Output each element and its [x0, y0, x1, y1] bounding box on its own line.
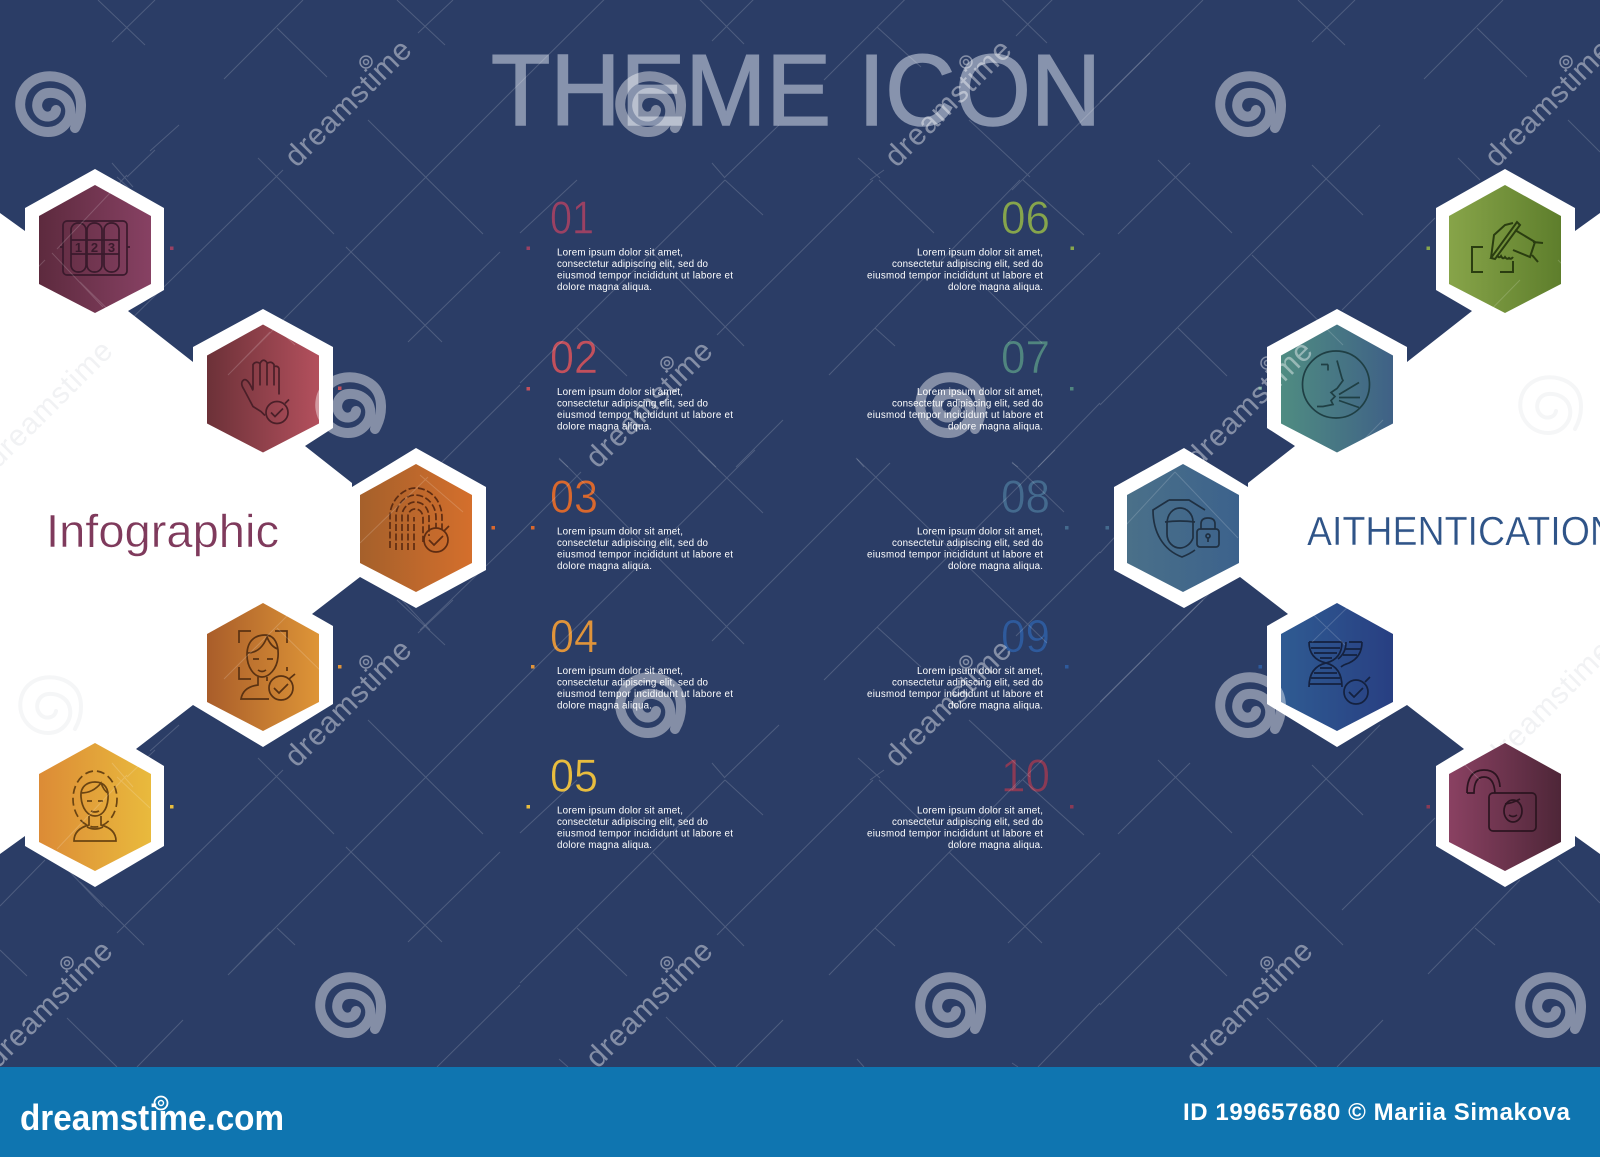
item 07: 07: [1001, 331, 1050, 383]
watermark small logos: [61, 56, 1572, 969]
item 06: 06: [1001, 192, 1050, 244]
watermark text: dreamstime: [278, 33, 418, 173]
item 09: 09: [1001, 610, 1050, 662]
item 08: 08: [1001, 470, 1050, 522]
text block 05: consectetur adipiscing elit, sed do: [557, 817, 709, 828]
text block 10: eiusmod tempor incididunt ut labore et: [867, 828, 1043, 840]
text block 08: Lorem ipsum dolor sit amet,: [917, 526, 1043, 538]
text block 10: dolore magna aliqua.: [948, 840, 1043, 851]
text block 10: [867, 806, 1044, 851]
hexagon 03 with fingerprint icon: [360, 464, 472, 592]
icon: DNA check: [1309, 642, 1370, 704]
item 10: [867, 750, 1050, 851]
icon: shield with lock: [1153, 500, 1219, 557]
item 05: [550, 750, 733, 851]
text block 08: eiusmod tempor incididunt ut labore et: [867, 550, 1043, 560]
text block 03: dolore magna aliqua.: [557, 561, 652, 572]
text block 05: [557, 806, 733, 851]
icon: keypad: 1: [75, 240, 82, 255]
icon: hand scan: [242, 360, 289, 424]
text block 04: dolore magna aliqua.: [557, 700, 652, 712]
item 03: [550, 470, 733, 572]
text block 09: consectetur adipiscing elit, sed do: [892, 678, 1044, 688]
watermark text: dreamstime: [579, 934, 719, 1074]
text block 02: eiusmod tempor incididunt ut labore et: [557, 410, 733, 421]
panel: right white band: [1114, 169, 1600, 887]
icon: voice recognition: [1302, 351, 1370, 418]
text block 04: Lorem ipsum dolor sit amet,: [557, 666, 683, 677]
text block 08: [867, 526, 1044, 572]
text block 07: [867, 387, 1044, 432]
icon: face id: [239, 631, 295, 700]
item 02: 02: [550, 331, 598, 383]
text block 10: consectetur adipiscing elit, sed do: [892, 817, 1044, 828]
item 10: 10: [1001, 750, 1050, 802]
hexagon 05 with face scan icon: [39, 743, 151, 871]
watermark text: dreamstime: [878, 33, 1018, 173]
watermark text: dreamstime: [1179, 334, 1319, 474]
footer credit: ID 199657680 © Mariia Simakova: [1183, 1099, 1571, 1126]
text block 09: [867, 666, 1044, 712]
icon: open lock with face: [1467, 770, 1536, 831]
text block 07: dolore magna aliqua.: [948, 422, 1043, 432]
text block 02: [557, 387, 733, 432]
text block 01: [557, 248, 733, 293]
text block 06: Lorem ipsum dolor sit amet,: [917, 248, 1043, 258]
text block 08: consectetur adipiscing elit, sed do: [892, 538, 1044, 549]
item 01: [550, 192, 733, 293]
text block 10: Lorem ipsum dolor sit amet,: [917, 806, 1043, 816]
connector dots: [170, 246, 1430, 808]
text block 01: Lorem ipsum dolor sit amet,: [557, 248, 683, 258]
text block 03: eiusmod tempor incididunt ut labore et: [557, 550, 733, 560]
text block 06: eiusmod tempor incididunt ut labore et: [867, 270, 1043, 282]
item 06: [867, 192, 1050, 293]
text block 04: eiusmod tempor incididunt ut labore et: [557, 689, 733, 700]
item 05: 05: [550, 750, 598, 802]
item 04: 04: [550, 610, 598, 662]
text block 06: [867, 248, 1044, 293]
text block 03: Lorem ipsum dolor sit amet,: [557, 526, 683, 538]
watermark text: dreamstime: [278, 633, 418, 773]
text block 01: dolore magna aliqua.: [557, 282, 652, 293]
text block 09: dolore magna aliqua.: [948, 700, 1043, 712]
text block 07: consectetur adipiscing elit, sed do: [892, 398, 1044, 410]
text block 01: eiusmod tempor incididunt ut labore et: [557, 270, 733, 282]
icon: keypad: 2: [91, 240, 98, 255]
text block 07: Lorem ipsum dolor sit amet,: [917, 387, 1043, 398]
watermark text: dreamstime: [1179, 934, 1319, 1074]
text block 03: consectetur adipiscing elit, sed do: [557, 538, 709, 549]
item 01: 01: [550, 192, 594, 244]
title: THEME ICON: [491, 35, 1101, 147]
icon: handwriting signature: [1472, 222, 1543, 272]
text block 01: consectetur adipiscing elit, sed do: [557, 259, 709, 270]
text block 09: eiusmod tempor incididunt ut labore et: [867, 689, 1043, 700]
text block 02: Lorem ipsum dolor sit amet,: [557, 387, 683, 398]
heading: Infographic: Infographic: [46, 505, 279, 557]
text block 07: eiusmod tempor incididunt ut labore et: [867, 410, 1043, 421]
text block 05: eiusmod tempor incididunt ut labore et: [557, 828, 733, 840]
item 07: [867, 331, 1050, 432]
item 02: [550, 331, 733, 432]
hexagon 09 with DNA icon: [1281, 603, 1393, 731]
icon: face outline: [73, 771, 117, 841]
icon: fingerprint: [390, 488, 442, 550]
faint watermark on white: [0, 334, 1600, 774]
hexagon 08 with shield lock icon: [1127, 464, 1239, 592]
hexagon 07 with voice icon: [1281, 324, 1393, 452]
hexagon 02 with hand icon: [207, 324, 319, 452]
text block 05: dolore magna aliqua.: [557, 840, 652, 851]
hexagon 01 with keypad icon: [39, 185, 151, 313]
panel: left white band: [0, 169, 486, 887]
icon: keypad: [60, 221, 130, 275]
text block 05: Lorem ipsum dolor sit amet,: [557, 806, 683, 816]
text block 03: [557, 526, 733, 572]
footer bar: [0, 1067, 1600, 1157]
watermark text: dreamstime: [579, 334, 719, 474]
item 09: [867, 610, 1050, 712]
text block 08: dolore magna aliqua.: [948, 561, 1043, 572]
item 08: [867, 470, 1050, 572]
text block 04: [557, 666, 733, 712]
text block 06: consectetur adipiscing elit, sed do: [892, 259, 1044, 270]
hexagon 06 with signature icon: [1449, 185, 1561, 313]
hexagon 10 with open lock icon: [1449, 743, 1561, 871]
text block 02: consectetur adipiscing elit, sed do: [557, 398, 709, 410]
footer logo: dreamstime.com: [20, 1097, 284, 1138]
text block 04: consectetur adipiscing elit, sed do: [557, 678, 709, 688]
text block 02: dolore magna aliqua.: [557, 422, 652, 432]
icon: keypad: 3: [108, 240, 115, 255]
watermark text: dreamstime: [878, 633, 1018, 773]
text block 06: dolore magna aliqua.: [948, 282, 1043, 293]
item 04: [550, 610, 733, 712]
item 03: 03: [550, 470, 598, 522]
text block 09: Lorem ipsum dolor sit amet,: [917, 666, 1043, 677]
hexagon 04 with face verification icon: [207, 603, 319, 731]
